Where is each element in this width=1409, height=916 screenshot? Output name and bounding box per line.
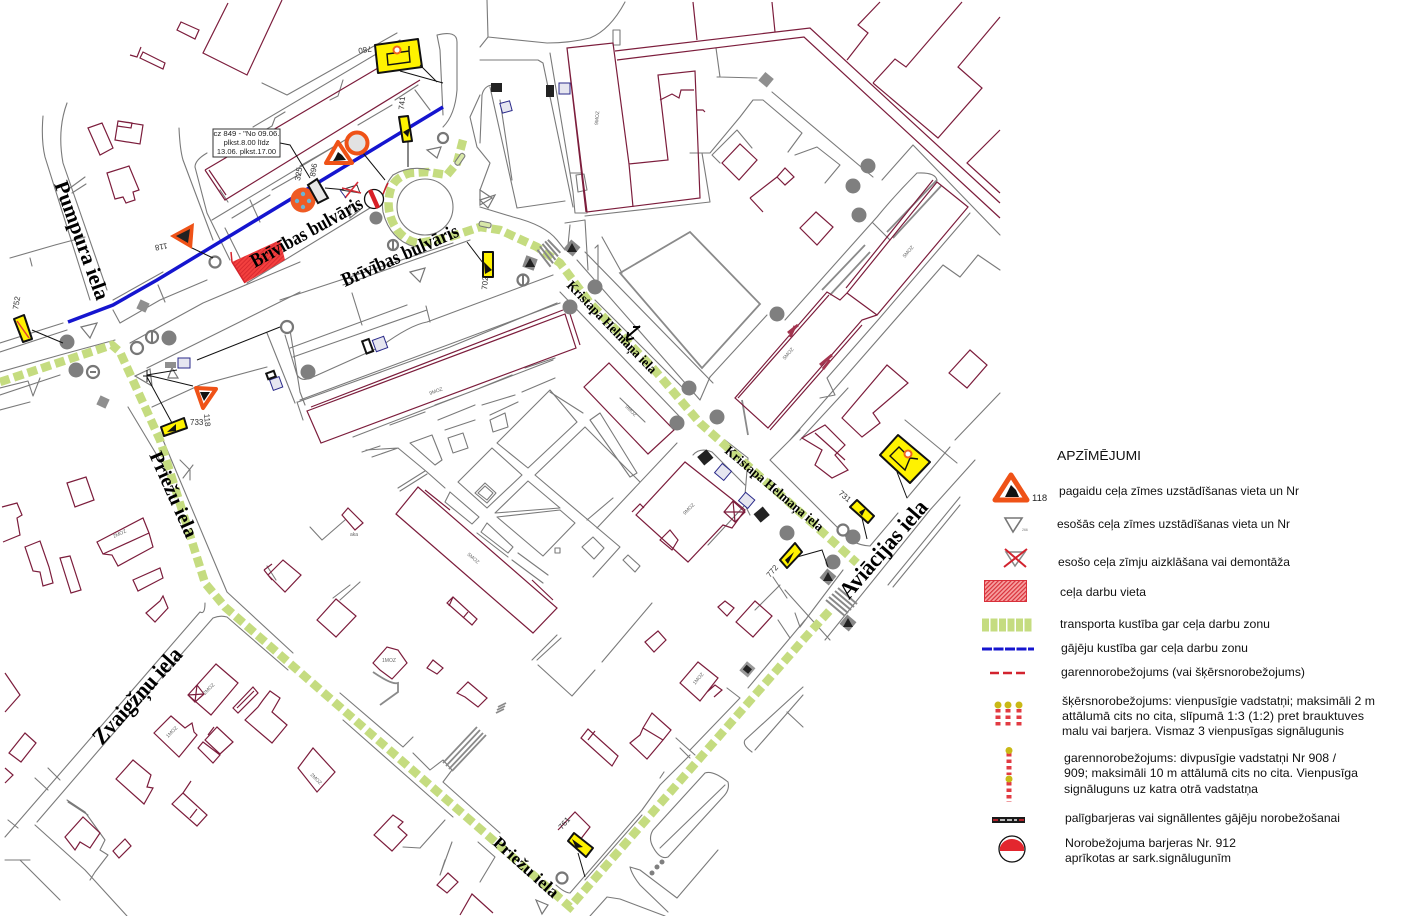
yellow temporary signs <box>11 39 930 857</box>
buildings <box>2 0 1000 915</box>
orange round sign <box>346 132 368 154</box>
sign board diamond <box>880 435 930 483</box>
orange left sign 118: 118 <box>154 241 168 252</box>
callout: no parking dates: 13.06. plkst.17.00 <box>217 147 276 156</box>
tiny map labels: 5MOZ <box>902 245 915 259</box>
pedestrian route, blue line <box>68 107 443 322</box>
legend row: barrier 912 <box>999 836 1236 865</box>
yellow temporary signs: 772 <box>765 563 780 579</box>
sign board 780: 780 <box>357 44 372 55</box>
tiny map labels: 9MOZ <box>429 386 444 397</box>
legend row: longitudinal posts <box>1006 747 1358 802</box>
callout: no parking dates <box>213 129 280 157</box>
legend row: temporary sign: 118 <box>1032 493 1047 504</box>
legend row: longitudinal posts: 909; maksimāli 10 m attālumā cits no cita. Vienpusīga <box>1064 766 1358 780</box>
sign board 780 <box>357 39 422 73</box>
street names: Brīvības bulvāris <box>247 192 367 272</box>
legend title: APZĪMĒJUMI <box>1057 448 1141 463</box>
road network lines <box>0 0 1000 916</box>
street names: Zvaigžņu iela <box>87 642 189 751</box>
legend row: pedestrian route: gājēju kustība gar ceļa darbu zonu <box>1061 641 1248 655</box>
legend row: road works site: ceļa darbu vieta <box>1060 585 1146 599</box>
street names: Kristapa Helmaņa iela <box>563 278 660 377</box>
legend row: existing sign: esošās ceļa zīmes uzstādīšanas vieta un Nr <box>1057 517 1290 531</box>
temporary orange signs: 325 <box>293 166 304 181</box>
yellow temporary signs: 733 <box>190 418 204 427</box>
legend row: road works site <box>984 580 1146 602</box>
yellow temporary signs: 702 <box>480 276 490 290</box>
street names: Priežu iela <box>144 448 202 541</box>
street names: Priežu iela <box>489 833 563 902</box>
yellow temporary signs: 741 <box>397 96 407 110</box>
legend row: auxiliary barriers: palīgbarjeras vai signāllentes gājēju norobežošanai <box>1065 811 1340 825</box>
callout: no parking dates: plkst.8.00 līdz <box>224 138 270 147</box>
legend row: barrier 912: Norobežojuma barjeras Nr. 912 <box>1065 836 1236 850</box>
small existing signs and trees <box>60 72 876 914</box>
tiny map labels: 1MOZ <box>382 658 396 664</box>
tiny map labels: 1MOZ <box>165 725 179 739</box>
tiny map labels: 5MOZ <box>782 347 795 361</box>
orange lower sign 118 <box>196 388 216 427</box>
legend row: transport route: transporta kustība gar ceļa darbu zonu <box>1060 617 1270 631</box>
legend row: cross barrier: šķērsnorobežojums: vienpusīgie vadstatņi; maksimāli 2 m <box>1062 694 1375 708</box>
tiny map labels: aka <box>350 532 358 538</box>
tiny map labels: 9MOZ <box>624 404 638 418</box>
legend row: temporary sign: pagaidu ceļa zīmes uzstādīšanas vieta un Nr <box>1059 484 1299 498</box>
pedestrian crossings <box>536 238 857 616</box>
orange triangle sign <box>326 142 352 163</box>
street names: Aviācijas iela <box>834 494 933 603</box>
tiny map labels <box>112 111 915 786</box>
temporary orange signs <box>154 132 388 427</box>
barrier 912 <box>364 190 384 208</box>
tiny map labels: 2MOZ <box>202 682 216 696</box>
tiny map labels: 9MOZ <box>594 111 601 125</box>
legend row: barrier 912: aprīkotas ar sark.signālugunīm <box>1065 851 1231 865</box>
orange left sign 118 <box>154 223 194 252</box>
street names: Kristapa Helmaņa iela <box>721 443 827 535</box>
tiny map labels: 1MOZ <box>692 672 705 686</box>
yellow temporary signs: 761 <box>557 815 572 831</box>
legend row: sign removal <box>1004 549 1290 569</box>
parkland outline <box>373 180 941 771</box>
legend row: longitudinal posts: garennorobežojums: divpusīgie vadstatņi Nr 908 / <box>1064 751 1337 765</box>
legend row: longitudinal posts: signāluguns uz katra otrā vadstatņa <box>1064 782 1258 796</box>
orange circle with blue dots <box>290 188 316 212</box>
temporary orange signs: 896 <box>308 162 319 177</box>
street names: Brīvības bulvāris <box>338 220 462 292</box>
street names <box>49 178 933 902</box>
legend row: existing sign: 266 <box>1022 528 1028 532</box>
tiny map labels: 9MOZ <box>682 502 696 516</box>
crossed out sign <box>340 182 361 198</box>
legend row: cross barrier: malu vai barjera. Vismaz 3 vienpusīgas signālugunis <box>1062 724 1344 738</box>
street names: Pumpura iela <box>49 178 115 304</box>
tiny map labels: 2MOZ <box>112 529 127 540</box>
yellow temporary signs: 752 <box>11 295 22 310</box>
roundabout <box>382 153 491 247</box>
orange lower sign 118: 118 <box>202 413 212 427</box>
legend <box>982 448 1375 865</box>
transport route along the works zone <box>0 140 857 907</box>
legend row: longitudinal barrier: garennorobežojums (vai šķērsnorobežojums) <box>1061 665 1305 679</box>
road works area <box>231 240 285 283</box>
callout: no parking dates: cz 849 - "No 09.06. <box>214 129 280 138</box>
legend row: cross barrier <box>994 694 1375 738</box>
leader lines <box>32 65 907 877</box>
tiny map labels: 5MOZ <box>466 552 480 565</box>
yellow temporary signs: 731 <box>837 489 853 504</box>
legend row: cross barrier: attālumā cits no cita, slīpumā 1:3 (1:2) pret brauktuves <box>1062 709 1364 723</box>
panel sign <box>308 179 328 203</box>
tiny map labels: 2MOZ <box>309 772 323 786</box>
legend row: sign removal: esošo ceļa zīmju aizklāšana vai demontāža <box>1058 555 1290 569</box>
legend row: temporary sign <box>995 475 1299 504</box>
